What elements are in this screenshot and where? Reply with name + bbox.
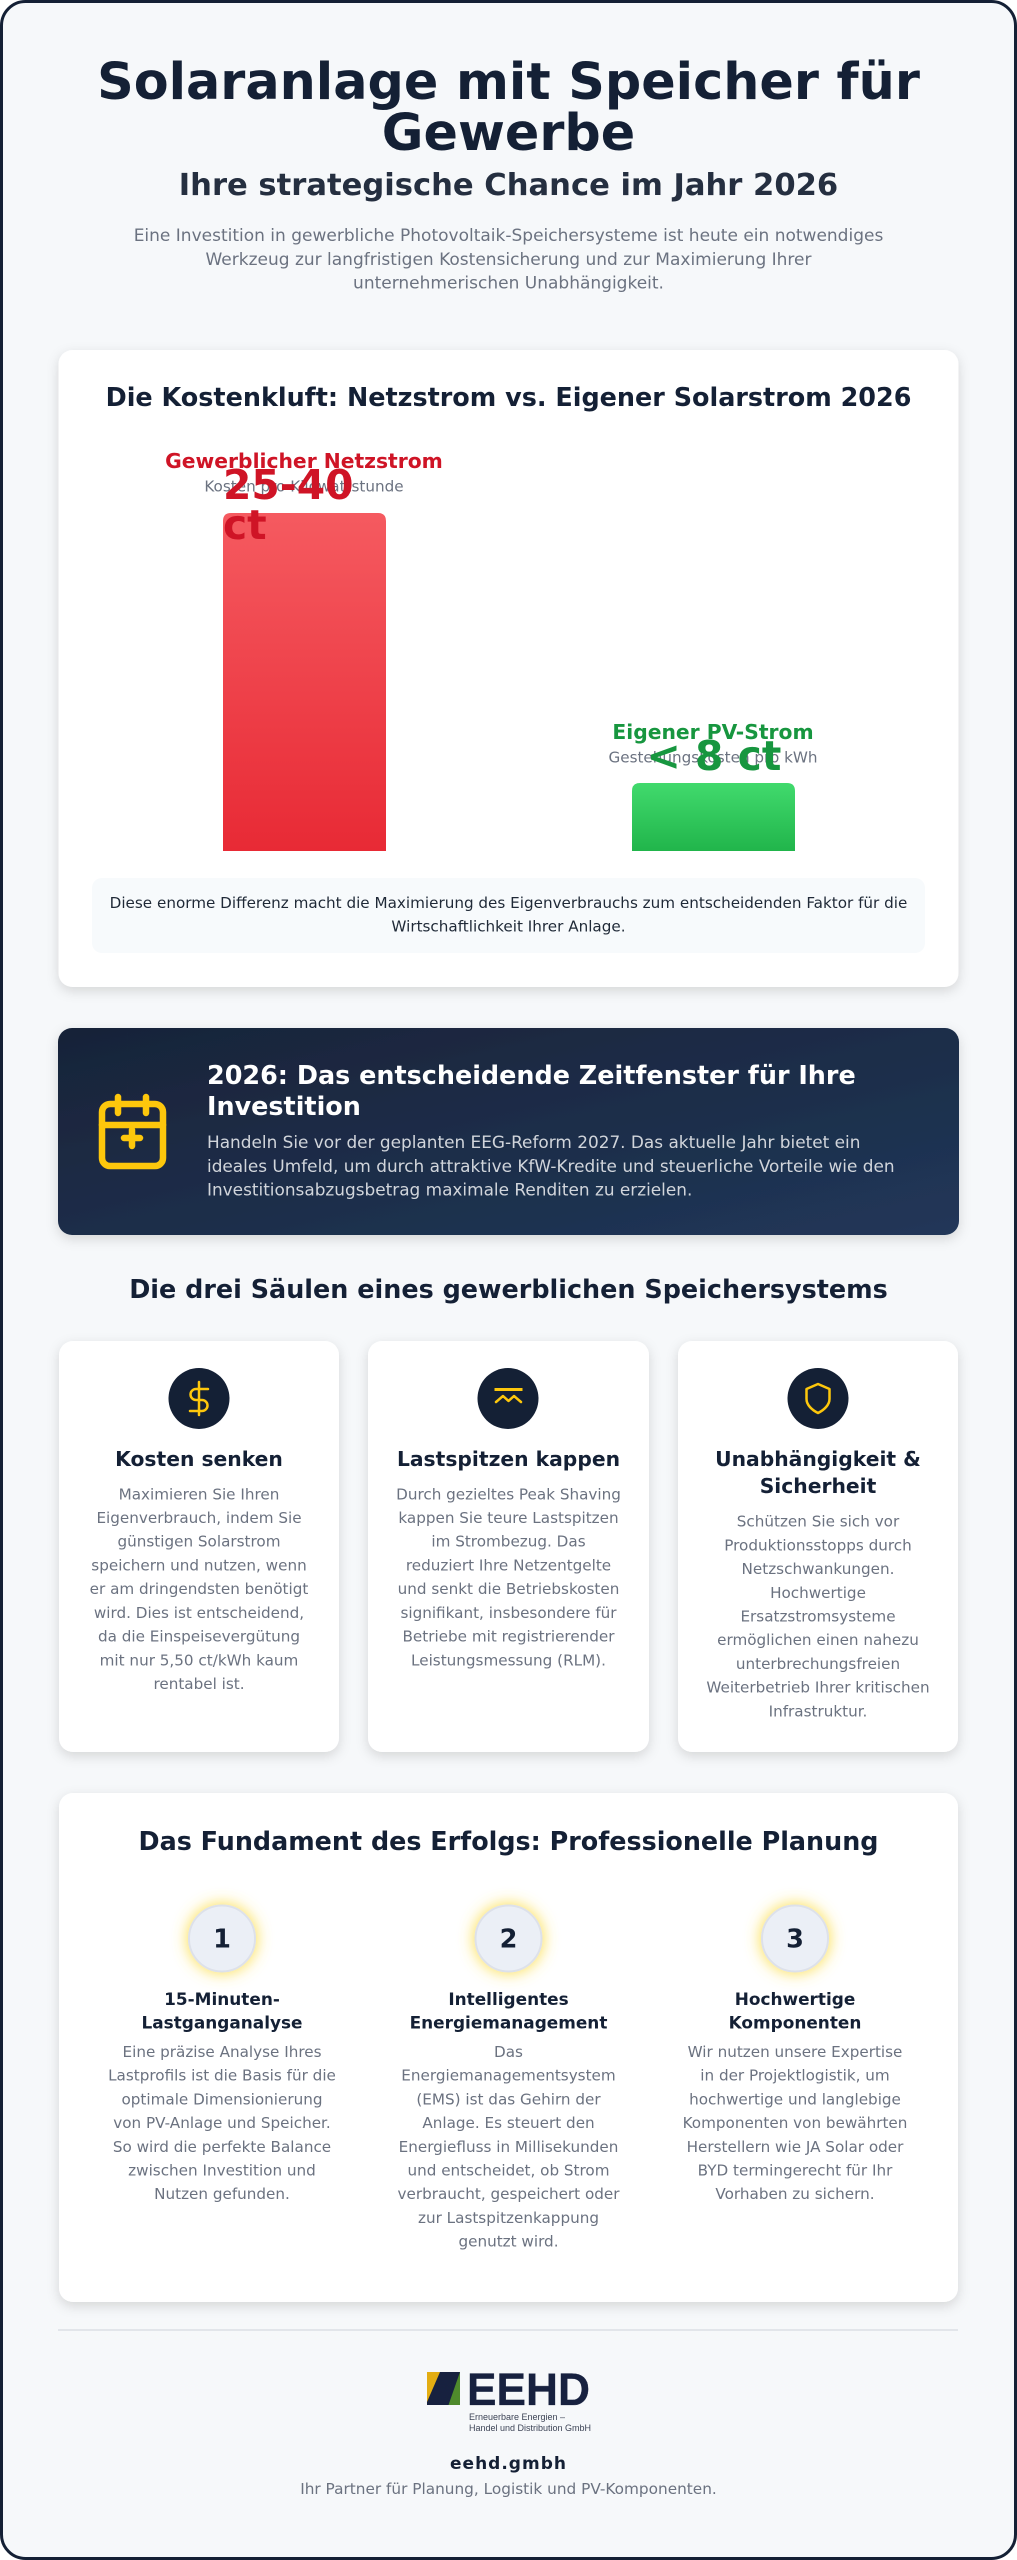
pillar text: kappen Sie teure Lastspitzen [398, 1509, 619, 1527]
bar: grid electricity [223, 513, 386, 851]
step 2: Intelligentes [448, 1989, 569, 2009]
intro text: Eine Investition in gewerbliche Photovoltaik-Speichersysteme ist heute ein notwendiges [134, 226, 883, 246]
step 3: BYD termingerecht für Ihr [698, 2162, 893, 2180]
step 3: Komponenten [729, 2012, 861, 2032]
step 2: genutzt wird. [458, 2233, 559, 2251]
chart heading: Die Kostenkluft: Netzstrom vs. Eigener Solarstrom 2026 [106, 383, 911, 413]
pillar text: speichern und nutzen, wenn [91, 1556, 307, 1574]
step 2: 2 [500, 1924, 517, 1954]
bar: own PV electricity [632, 783, 795, 851]
bar label: own PV electricity: Eigener PV-Strom [612, 720, 814, 744]
pillar text: unterbrechungsfreien [736, 1655, 900, 1673]
step 3: in der Projektlogistik, um [700, 2067, 890, 2085]
step 1: So wird die perfekte Balance [113, 2138, 331, 2156]
logo: EEHD: Erneuerbare Energien – [469, 2412, 565, 2422]
tagline: Ihr Partner für Planung, Logistik und PV-Komponenten. [300, 2480, 717, 2498]
step 2: Anlage. Es steuert den [422, 2114, 595, 2132]
pillar text: ermöglichen einen nahezu [717, 1631, 919, 1649]
pillar text: Weiterbetrieb Ihrer kritischen [706, 1679, 930, 1697]
step 2: zur Lastspitzenkappung [418, 2209, 599, 2227]
step 3: Herstellern wie JA Solar oder [687, 2138, 904, 2156]
panel: professional planning [59, 1793, 958, 2302]
panel: pillar independence [678, 1341, 958, 1752]
step 2: Energiemanagement [410, 2012, 607, 2032]
pillar text: Betriebe mit registrierender [402, 1628, 615, 1646]
step 3: Wir nutzen unsere Expertise [688, 2043, 902, 2061]
step 1: 15-Minuten- [164, 1989, 280, 2009]
bar sublabel: grid electricity: Kosten pro Kilowattstunde [204, 478, 404, 496]
pillar text: da die Einspeisevergütung [98, 1628, 300, 1646]
footer [300, 2364, 717, 2498]
step 1: Lastganganalyse [141, 2012, 303, 2032]
step 1: Eine präzise Analyse Ihres [123, 2043, 322, 2061]
pillar text: Maximieren Sie Ihren [119, 1485, 279, 1503]
step 1: Nutzen gefunden. [154, 2185, 290, 2203]
step 2: Energiefluss in Millisekunden [399, 2138, 618, 2156]
logo: EEHD: EEHD [467, 2364, 590, 2415]
step 1: von PV-Anlage und Speicher. [113, 2114, 331, 2132]
pillar text: reduziert Ihre Netzentgelte [406, 1556, 611, 1574]
pillar text: mit nur 5,50 ct/kWh kaum [100, 1651, 298, 1669]
callout note: Wirtschaftlichkeit Ihrer Anlage. [391, 918, 626, 936]
pillar title: Unabhängigkeit & [715, 1447, 921, 1471]
step 1: Lastprofils ist die Basis für die [108, 2067, 336, 2085]
pillar text: günstigen Solarstrom [118, 1533, 280, 1551]
step 2: (EMS) ist das Gehirn der [416, 2090, 601, 2108]
bar sublabel: own PV electricity: Gestehungskosten pro kWh [608, 748, 818, 766]
panel: pillar peak shaving [368, 1341, 649, 1752]
step 1: 1 [213, 1924, 231, 1954]
step 3: Hochwertige [735, 1989, 855, 2009]
step 2: Das [494, 2043, 523, 2061]
bar label: grid electricity: Gewerblicher Netzstrom [165, 449, 443, 473]
section heading: three pillars: Die drei Säulen eines gewerblichen Speichersystems [129, 1275, 888, 1305]
intro text: unternehmerischen Unabhängigkeit. [353, 274, 664, 294]
bar value: grid electricity: ct [223, 501, 267, 549]
pillar text: Durch gezieltes Peak Shaving [396, 1485, 621, 1503]
panel: 2026 time window banner [58, 1028, 959, 1235]
icon: peak shaving [478, 1368, 538, 1429]
pillar text: signifikant, insbesondere für [400, 1604, 617, 1622]
pillar text: Schützen Sie sich vor [737, 1513, 900, 1531]
banner text: Handeln Sie vor der geplanten EEG-Reform 2027. Das aktuelle Jahr bietet ein [207, 1132, 860, 1152]
step 2: verbraucht, gespeichert oder [398, 2185, 620, 2203]
step 1: zwischen Investition und [128, 2162, 316, 2180]
pillar text: Leistungsmessung (RLM). [411, 1651, 606, 1669]
bar value: grid electricity: 25-40 [223, 461, 353, 509]
pillar text: im Strombezug. Das [431, 1533, 586, 1551]
step 2: und entscheidet, ob Strom [407, 2162, 610, 2180]
callout note [92, 878, 925, 953]
step 2: Energiemanagementsystem [401, 2067, 616, 2085]
pillar title: Sicherheit [760, 1474, 877, 1498]
title: Solaranlage mit Speicher für [97, 52, 920, 111]
banner text: Investitionsabzugsbetrag maximale Renditen zu erzielen. [207, 1180, 692, 1200]
pillar text: Infrastruktur. [769, 1702, 867, 1720]
subtitle: Ihre strategische Chance im Jahr 2026 [179, 168, 838, 203]
pillar text: wird. Dies ist entscheidend, [94, 1604, 304, 1622]
pillar text: rentabel ist. [153, 1675, 245, 1693]
panel: pillar costs [59, 1341, 339, 1752]
callout note: Diese enorme Differenz macht die Maximierung des Eigenverbrauchs zum entscheidenden Faktor für die [110, 894, 907, 912]
title: Gewerbe [382, 103, 635, 162]
banner heading: 2026: Das entscheidende Zeitfenster für Ihre [207, 1061, 856, 1091]
header [97, 52, 920, 294]
step 1: optimale Dimensionierung [121, 2090, 323, 2108]
pillar text: Hochwertige [770, 1584, 866, 1602]
pillar text: und senkt die Betriebskosten [398, 1580, 619, 1598]
step 3: hochwertige und langlebige [689, 2090, 901, 2108]
step 3: Komponenten von bewährten [683, 2114, 907, 2132]
bar value: own PV electricity: < 8 ct [647, 732, 781, 780]
panel: cost gap chart [58, 350, 958, 987]
logo: EEHD: Handel und Distribution GmbH [469, 2423, 591, 2433]
step 2 [398, 1906, 620, 2251]
pillar text: er am dringendsten benötigt [90, 1580, 308, 1598]
step 3: 3 [786, 1924, 804, 1954]
icon: shield [788, 1368, 848, 1429]
banner text: ideales Umfeld, um durch attraktive KfW-Kredite und steuerliche Vorteile wie den [207, 1156, 895, 1176]
intro text: Werkzeug zur langfristigen Kostensicherung und zur Maximierung Ihrer [205, 250, 812, 270]
step 3 [683, 1906, 907, 2203]
banner heading: Investition [207, 1092, 361, 1122]
website: eehd.gmbh [450, 2454, 567, 2474]
step 3: Vorhaben zu sichern. [715, 2185, 875, 2203]
logo: EEHD [427, 2364, 591, 2433]
pillar text: Produktionsstopps durch [724, 1536, 912, 1554]
planning heading: Das Fundament des Erfolgs: Professionelle Planung [139, 1826, 878, 1856]
icon: calendar [102, 1097, 163, 1166]
pillar text: Netzschwankungen. [742, 1560, 894, 1578]
pillar title: Lastspitzen kappen [397, 1447, 620, 1471]
pillar text: Ersatzstromsysteme [740, 1608, 896, 1626]
step 1 [108, 1906, 336, 2203]
pillar text: Eigenverbrauch, indem Sie [96, 1509, 302, 1527]
pillar title: Kosten senken [115, 1447, 283, 1471]
icon: dollar [168, 1368, 230, 1429]
